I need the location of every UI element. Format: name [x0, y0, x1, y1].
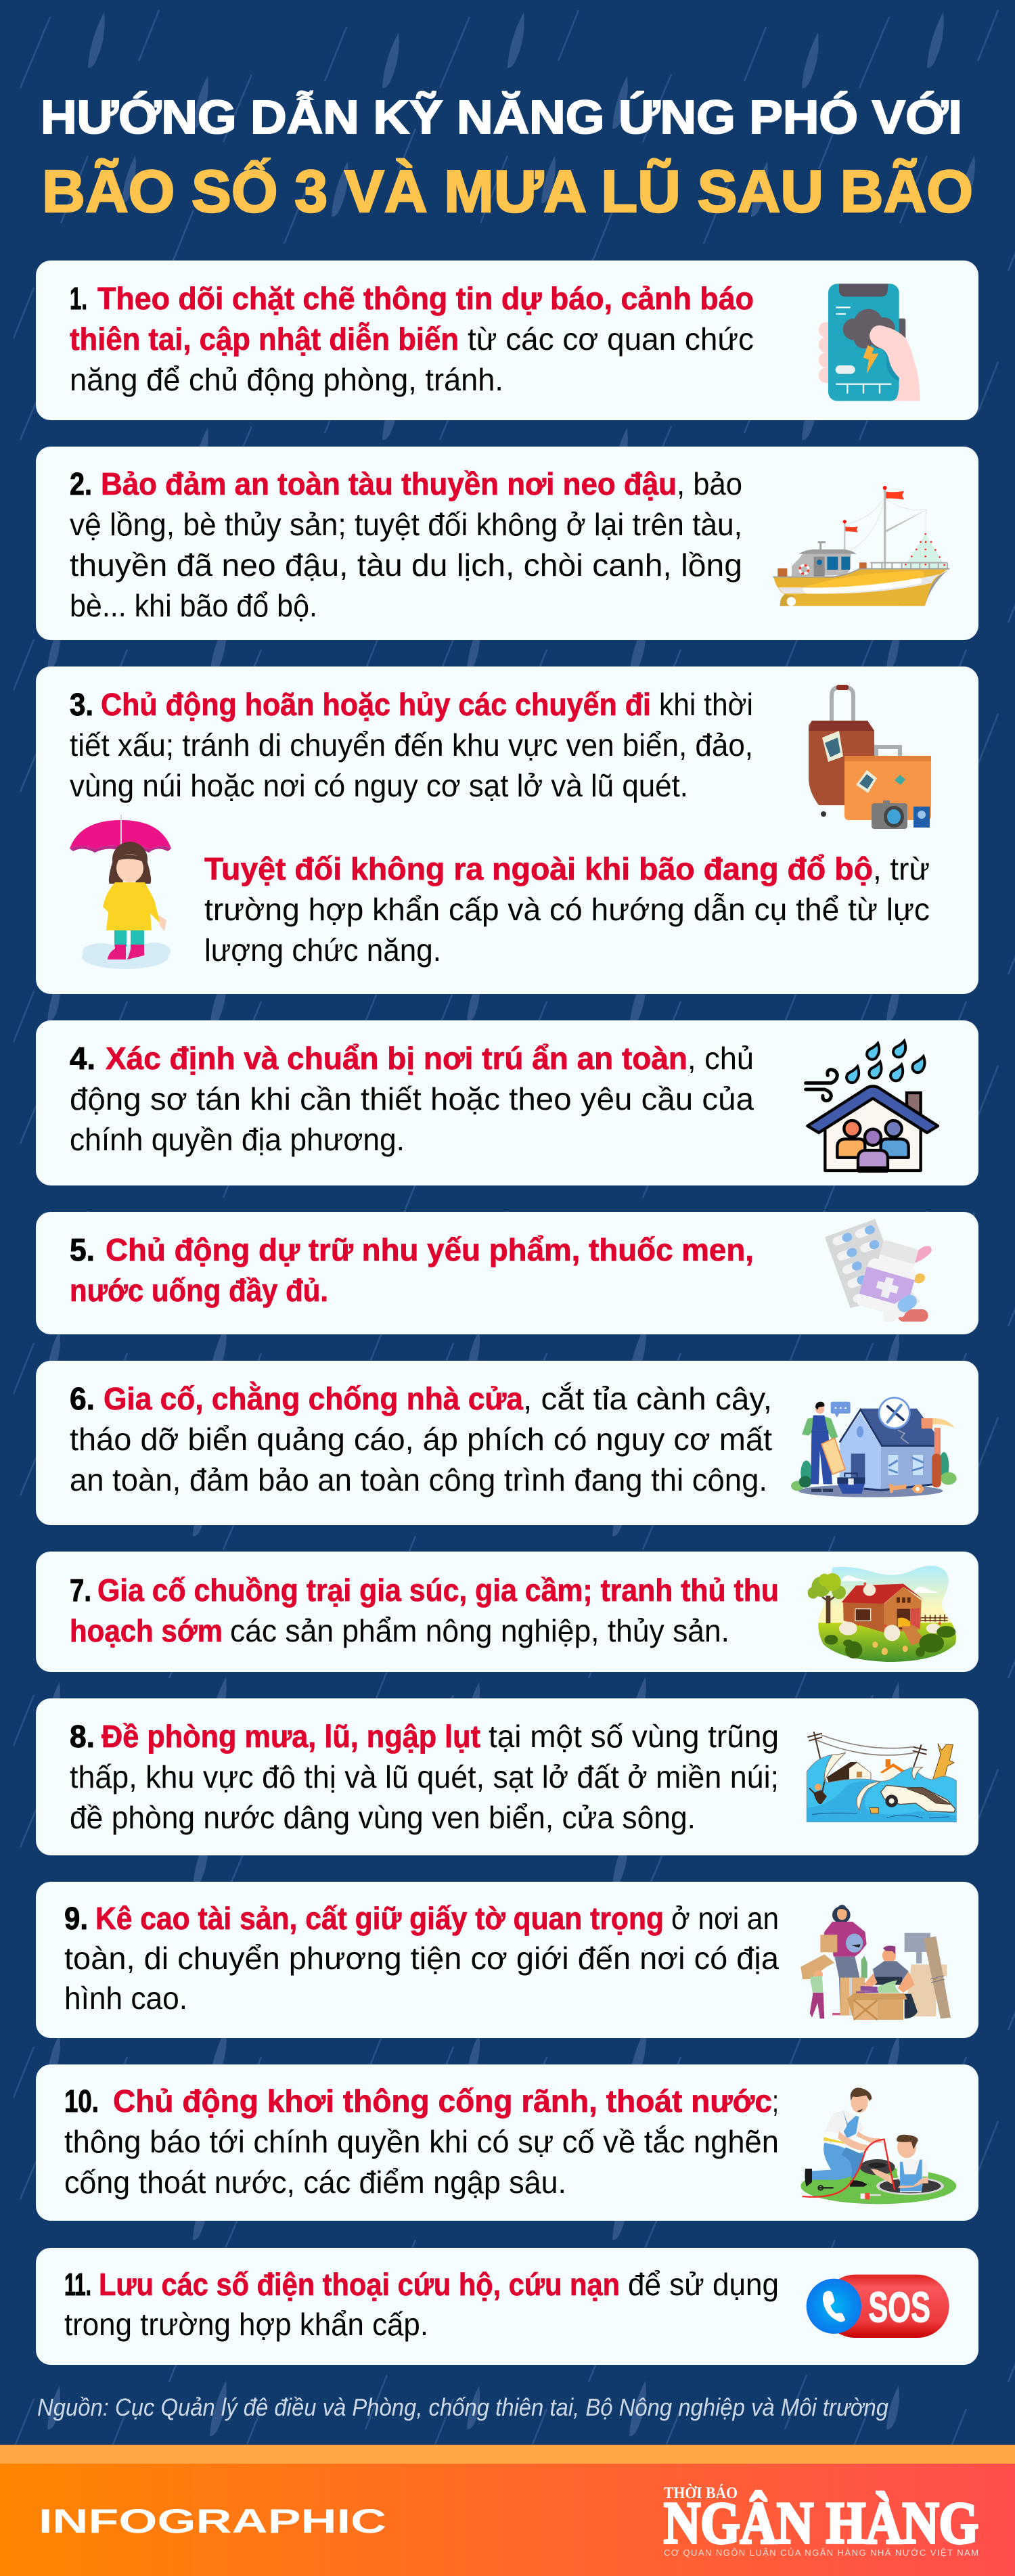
text block — [70, 281, 754, 397]
card background — [36, 261, 978, 420]
icon: SOS call button — [807, 2275, 949, 2338]
text block — [70, 466, 742, 623]
text block: 4. — [70, 1041, 95, 1076]
text block: Chủ động dự trữ nhu yếu phẩm, thuốc men, — [106, 1232, 754, 1267]
text block: hoạch sớm — [70, 1613, 223, 1648]
text block: bè... khi bão đổ bộ. — [70, 588, 317, 623]
panel: item 8 — [36, 1698, 978, 1855]
icon: farm with chickens — [808, 1563, 959, 1663]
text block — [64, 2267, 779, 2342]
text block: Chủ động khơi thông cống rãnh, thoát nước — [113, 2083, 772, 2119]
text block — [64, 2083, 779, 2200]
panel: item 9 — [36, 1882, 978, 2038]
text block: an toàn, đảm bảo an toàn công trình đang thi công. — [70, 1462, 767, 1497]
panel: item 11 — [36, 2248, 978, 2365]
text block: năng để chủ động phòng, tránh. — [70, 362, 503, 397]
panel: item 2 — [36, 447, 978, 640]
card background — [36, 1698, 978, 1855]
footer gradient band — [0, 2464, 1015, 2576]
card background — [36, 1552, 978, 1672]
card background — [36, 2064, 978, 2221]
footer — [0, 2445, 1015, 2576]
text block: Bảo đảm an toàn tàu thuyền nơi neo đậu — [101, 466, 677, 501]
title line 2: BÃO SỐ 3 VÀ MƯA LŨ SAU BÃO — [42, 158, 973, 225]
icon: SOS call button: SOS — [868, 2284, 930, 2331]
icon: house repair — [791, 1398, 957, 1497]
text block: tháo dỡ biển quảng cáo, áp phích có nguy cơ mất — [70, 1422, 772, 1457]
card background — [36, 1020, 978, 1185]
text block: , chủ — [687, 1041, 754, 1076]
text block — [70, 1573, 779, 1648]
title line 1: HƯỚNG DẪN KỸ NĂNG ỨNG PHÓ VỚI — [41, 90, 962, 143]
panel: item 3 — [36, 666, 978, 994]
text block: travel: Chủ động hoãn hoặc hủy các chuyến đi — [101, 687, 651, 722]
icon: workers clearing drain — [800, 2087, 956, 2204]
text block: đề phòng nước dâng vùng ven biển, cửa sông. — [70, 1800, 696, 1835]
card background — [36, 1882, 978, 2038]
card background — [36, 2248, 978, 2365]
newspaper logo: THỜI BÁO — [664, 2484, 738, 2502]
text block: stay indoors: , trừ — [873, 851, 930, 886]
text block — [70, 1381, 772, 1497]
text block: nước uống đầy đủ. — [70, 1273, 328, 1308]
panel: item 7 — [36, 1552, 978, 1672]
text block: toàn, di chuyển phương tiện cơ giới đến nơi có địa — [64, 1941, 779, 1976]
icon: girl with umbrella — [70, 815, 171, 969]
icon: family moving belongings — [800, 1905, 951, 2020]
text block: travel: vùng núi hoặc nơi có nguy cơ sạt lở và lũ quét. — [70, 768, 688, 803]
text block: 7. — [70, 1573, 91, 1608]
text block: để sử dụng — [628, 2267, 779, 2302]
text block: ; — [772, 2083, 779, 2119]
icon: phone with storm — [819, 284, 920, 401]
text block: cống thoát nước, các điểm ngập sâu. — [64, 2165, 566, 2200]
text block: Gia cố, chằng chống nhà cửa — [104, 1381, 523, 1416]
panel: item 10 — [36, 2064, 978, 2221]
text block: hình cao. — [64, 1981, 187, 2016]
newspaper logo: CƠ QUAN NGÔN LUẬN CỦA NGÂN HÀNG NHÀ NƯỚC VIỆT NAM — [664, 2548, 978, 2558]
panel: item 6 — [36, 1361, 978, 1525]
card background — [36, 1361, 978, 1525]
text block: Kê cao tài sản, cất giữ giấy tờ quan trọng — [95, 1901, 664, 1936]
icon: suitcases — [809, 685, 931, 829]
card background — [36, 666, 978, 994]
text block — [70, 1232, 754, 1308]
icon: medicine — [825, 1219, 932, 1325]
text block: thấp, khu vực đô thị và lũ quét, sạt lở đất ở miền núi; — [70, 1759, 779, 1794]
text block: stay indoors: lượng chức năng. — [204, 932, 441, 968]
text block: travel — [70, 687, 753, 803]
panel: item 4 — [36, 1020, 978, 1185]
text block: tại một số vùng trũng — [489, 1719, 779, 1754]
text block: động sơ tán khi cần thiết hoặc theo yêu cầu của — [70, 1081, 754, 1116]
source note: Nguồn: Cục Quản lý đê điều và Phòng, chống thiên tai, Bộ Nông nghiệp và Môi trường — [37, 2393, 888, 2421]
text block: 10. — [64, 2083, 99, 2119]
text block — [70, 1719, 779, 1835]
footer label: INFOGRAPHIC — [39, 2502, 386, 2540]
text block: thông báo tới chính quyền khi có sự cố về tắc nghẽn — [64, 2124, 779, 2159]
icon: fishing boat — [773, 486, 949, 606]
text block: stay indoors: trường hợp khẩn cấp và có hướng dẫn cụ thể từ lực — [204, 892, 930, 927]
text block: Theo dõi chặt chẽ thông tin dự báo, cảnh báo — [97, 281, 754, 316]
text block: stay indoors — [204, 851, 930, 968]
text block: thiên tai, cập nhật diễn biến — [70, 321, 459, 357]
text block: 11. — [64, 2267, 91, 2302]
footer top stripe — [0, 2445, 1015, 2464]
icon: flood scene — [807, 1732, 956, 1822]
text block: 9. — [64, 1901, 88, 1936]
card background — [36, 1212, 978, 1334]
title — [41, 90, 973, 225]
panel: item 5 — [36, 1212, 978, 1334]
text block: vệ lồng, bè thủy sản; tuyệt đối không ở lại trên tàu, — [70, 507, 742, 542]
icon: family in house with rain — [806, 1039, 938, 1171]
text block — [64, 1901, 779, 2016]
text block: 2. — [70, 466, 92, 501]
text block: Đề phòng mưa, lũ, ngập lụt — [102, 1719, 480, 1754]
text block: các sản phẩm nông nghiệp, thủy sản. — [230, 1613, 729, 1648]
text block: 5. — [70, 1232, 95, 1267]
text block: , cắt tỉa cành cây, — [523, 1381, 772, 1416]
text block: , bảo — [677, 466, 742, 501]
text block: stay indoors: Tuyệt đối không ra ngoài khi bão đang đổ bộ — [204, 851, 873, 886]
text block: ở nơi an — [671, 1901, 779, 1936]
text block: 8. — [70, 1719, 95, 1754]
panel: item 1 — [36, 261, 978, 420]
card background — [36, 447, 978, 640]
text block: Lưu các số điện thoại cứu hộ, cứu nạn — [99, 2267, 620, 2302]
text block: trong trường hợp khẩn cấp. — [64, 2307, 428, 2342]
text block: thuyền đã neo đậu, tàu du lịch, chòi canh, lồng — [70, 547, 742, 583]
text block: từ các cơ quan chức — [468, 321, 754, 357]
text block: 6. — [70, 1381, 95, 1416]
text block: travel: tiết xấu; tránh di chuyển đến khu vực ven biển, đảo, — [70, 727, 753, 763]
text block: chính quyền địa phương. — [70, 1122, 405, 1157]
text block: 1. — [70, 281, 87, 316]
text block: travel: khi thời — [659, 687, 753, 722]
text block: Gia cố chuồng trại gia súc, gia cầm; tranh thủ thu — [97, 1573, 779, 1608]
text block — [70, 1041, 754, 1157]
text block: travel: 3. — [70, 687, 93, 722]
text block: Xác định và chuẩn bị nơi trú ẩn an toàn — [106, 1041, 687, 1076]
